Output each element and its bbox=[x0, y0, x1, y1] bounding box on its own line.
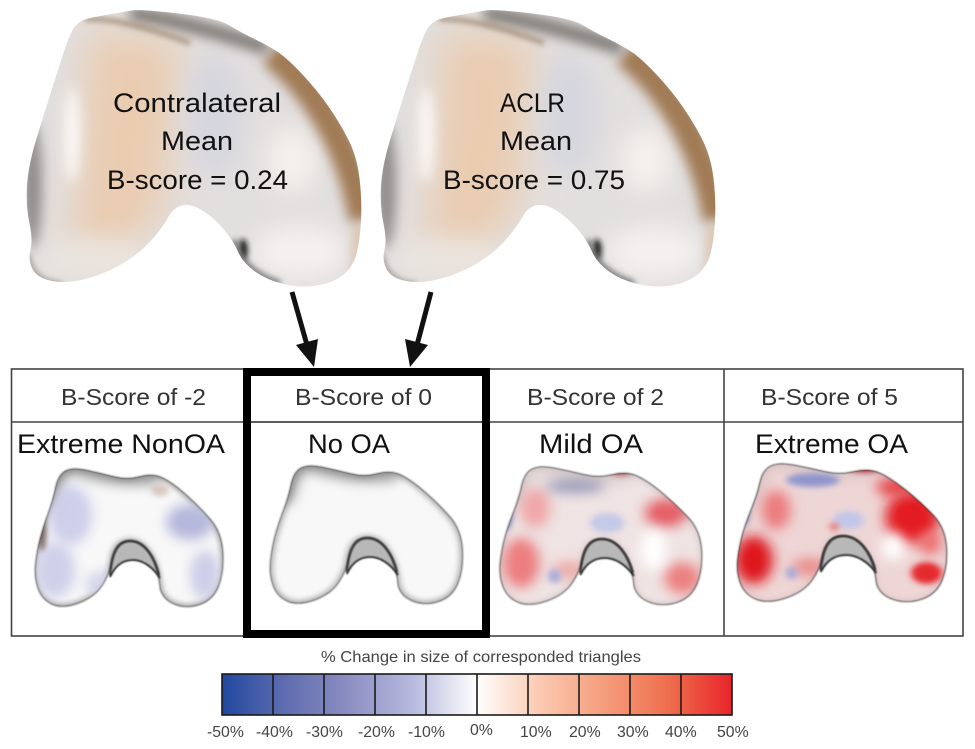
text: contralateral mean B-score bbox=[107, 88, 288, 195]
table grid bbox=[11, 369, 963, 636]
icon: knee no OA bbox=[254, 452, 480, 617]
colour bar tick labels: 40% bbox=[665, 724, 697, 741]
panel: ACLR femur model bbox=[354, 0, 734, 300]
text: ACLR mean B-score: ACLR bbox=[500, 88, 565, 118]
colour bar tick labels: -40% bbox=[256, 724, 293, 741]
text: contralateral mean B-score: B-score = 0.24 bbox=[107, 165, 288, 195]
colour bar tick labels: -20% bbox=[358, 724, 395, 741]
highlight frame bbox=[247, 372, 486, 634]
heading: No OA: No OA bbox=[308, 429, 390, 459]
panel: contralateral femur model bbox=[0, 0, 380, 300]
icon: knee extreme OA bbox=[736, 462, 948, 604]
heading: B-Score of 2: B-Score of 2 bbox=[527, 384, 664, 410]
heading: B-Score of 5: B-Score of 5 bbox=[761, 384, 898, 410]
text: ACLR mean B-score: Mean bbox=[500, 126, 572, 156]
colour bar tick labels bbox=[207, 722, 749, 741]
icon: knee extreme non-OA bbox=[34, 467, 225, 608]
icon: contralateral knee surface bbox=[0, 0, 380, 300]
icon: knee mild OA bbox=[498, 465, 704, 606]
colour bar tick labels: 50% bbox=[717, 724, 749, 741]
icon: ACLR knee surface bbox=[354, 0, 734, 300]
colour bar tick labels: -30% bbox=[306, 724, 343, 741]
colour bar tick labels: -50% bbox=[207, 724, 244, 741]
arrow: contralateral to B-score 0 bbox=[292, 292, 318, 367]
text: contralateral mean B-score: Contralateral bbox=[113, 88, 281, 118]
colour bar tick labels: 20% bbox=[569, 724, 601, 741]
text: ACLR mean B-score: B-score = 0.75 bbox=[443, 165, 625, 195]
heading: B-Score of 0: B-Score of 0 bbox=[295, 384, 432, 410]
legend title: % Change in size of corresponded triangles bbox=[321, 649, 641, 666]
legend: percent change colour bar bbox=[207, 649, 749, 741]
heading: Mild OA: Mild OA bbox=[539, 429, 643, 459]
text: contralateral mean B-score: Mean bbox=[161, 126, 233, 156]
colour bar tick labels: -10% bbox=[408, 724, 445, 741]
arrow: ACLR to B-score 0 bbox=[405, 292, 431, 367]
colour bar tick labels: 30% bbox=[617, 724, 649, 741]
panel: highlighted B-Score of 0 column bbox=[247, 372, 486, 634]
colour bar tick labels: 0% bbox=[470, 722, 493, 739]
colour bar bbox=[222, 674, 732, 715]
heading: B-Score of -2: B-Score of -2 bbox=[61, 384, 206, 410]
panel: B-score reference table bbox=[11, 369, 966, 636]
colour bar tick labels: 10% bbox=[520, 724, 552, 741]
heading: Extreme OA: Extreme OA bbox=[755, 429, 908, 459]
heading: Extreme NonOA: Extreme NonOA bbox=[17, 429, 225, 459]
text: ACLR mean B-score bbox=[443, 88, 625, 195]
